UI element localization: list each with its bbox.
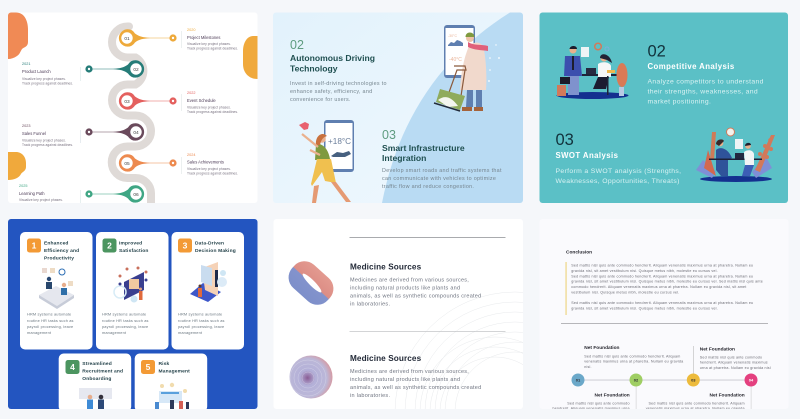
- card 2: [96, 232, 168, 350]
- text: medicine sources 1: Medicine Sources: [350, 262, 422, 272]
- text: foundation bottom left: Net Foundation: [595, 392, 630, 398]
- card 3: HRM systems automate: [178, 312, 222, 316]
- number badge 2: 2: [107, 240, 112, 250]
- text: swot analysis: [556, 131, 681, 185]
- text: foundation bottom right: Sed mattis nisl quis ante commodo hendrerit. Aliquam: [649, 402, 745, 406]
- text: 2021 product launch: Product Launch: [22, 69, 51, 74]
- serpentine road: [112, 26, 151, 210]
- text: foundation top right: Net Foundation: [700, 346, 735, 352]
- illustration: team at table: [696, 128, 775, 182]
- text: 2022 event schedule: [182, 91, 238, 114]
- step 02 marker: [85, 60, 144, 78]
- card 4: Onboarding: [82, 376, 112, 382]
- card 5: Risk: [158, 361, 170, 367]
- text: foundation top right: urna at pharetra. Nullam eu gravida nisl: [700, 366, 771, 370]
- card 2: routine HR tasks such as: [102, 318, 149, 323]
- text: conclusion quote: commodo hendrerit. Aliquam venenatis maximus urna at pharetra. Nullam eu gravida nisl, sit amet: [571, 285, 746, 289]
- panel: conclusion and timeline: [540, 219, 788, 410]
- card 1: Productivity: [44, 256, 74, 262]
- text: medicine sources 1: [350, 262, 481, 308]
- text: 2023 sales funnel: Visualize key project phases.: [22, 138, 66, 142]
- text: medicine sources 2: including natural products like plants and: [350, 377, 460, 383]
- text: competitive analysis: 02: [648, 42, 666, 60]
- text: medicine sources 2: Medicine Sources: [350, 354, 422, 363]
- text: section 02: Invest in self-driving technologies to: [290, 81, 387, 87]
- text: 2025 learning path: [19, 184, 81, 203]
- timeline node 02: 02: [634, 378, 639, 382]
- card 2: Improved: [119, 240, 142, 246]
- text: foundation top left: nisl.: [584, 365, 592, 369]
- text: swot analysis: SWOT Analysis: [556, 151, 619, 160]
- text: 2022 event schedule: Event Schedule: [187, 98, 216, 103]
- panel: autonomous driving: [273, 12, 523, 203]
- timeline node 04: 04: [749, 378, 754, 382]
- blob: orange top left: [8, 12, 28, 59]
- text: 2024 sales achievements: Track progress against deadlines.: [187, 172, 238, 176]
- text: 2023 sales funnel: 2023: [22, 124, 30, 128]
- text: 2021 product launch: 2021: [22, 62, 30, 66]
- text: competitive analysis: market positioning.: [648, 98, 711, 106]
- text: section 02: 02: [290, 38, 304, 52]
- text: conclusion quote: gravida nisl, sit amet vestibulum nisi. Quisque metus nibh, molestie eu cursus vel. Sed mattis nisl quis ante: [571, 280, 763, 284]
- text: section 03: can communicate with vehicles to optimize: [382, 176, 496, 182]
- text: swot analysis: 03: [556, 131, 574, 149]
- card 3: Decision Making: [195, 248, 236, 254]
- text: 2023 sales funnel: Sales Funnel: [22, 131, 46, 136]
- text: foundation top right: [700, 346, 771, 370]
- text: section 02: [290, 38, 387, 103]
- illustration: risk team: [155, 383, 189, 410]
- text: foundation bottom left: [552, 392, 630, 410]
- number badge 3: 3: [183, 240, 188, 250]
- text: 2022 event schedule: 2022: [187, 91, 195, 95]
- icon: striped ring: [283, 255, 339, 311]
- step 02 marker: 02: [133, 67, 139, 73]
- text: swot analysis: Weaknesses, Opportunities, Threats): [556, 178, 680, 185]
- illustration: person with weather phone: +18°C: [328, 137, 351, 146]
- number badge 5: 5: [146, 362, 151, 372]
- card 3: management: [178, 330, 203, 335]
- card 1: management: [27, 330, 52, 335]
- text: foundation bottom left: hendrerit. Aliquam venenatis maximus urna: [552, 406, 630, 410]
- text: medicine sources 1: animals, as well as synthetic compounds created: [350, 294, 481, 300]
- text: 2023 sales funnel: Track progress against deadlines.: [22, 143, 73, 147]
- text: 2023 sales funnel: [22, 124, 81, 147]
- text: foundation top right: hendrerit. Aliquam venenatis maximus: [700, 361, 768, 365]
- text: foundation top left: [584, 345, 684, 369]
- icon: line sphere: [290, 356, 332, 398]
- blue curved shape: [382, 12, 523, 203]
- text: medicine sources 2: Medicines are derived from various sources,: [350, 369, 469, 375]
- step 05 marker: 05: [124, 161, 130, 167]
- card 3: routine HR tasks such as: [178, 318, 225, 323]
- card 1: payroll processing, leave: [27, 324, 73, 329]
- card 5: [135, 354, 207, 412]
- text: section 03: Integration: [382, 153, 426, 163]
- text: 2020 project milestones: [182, 28, 238, 50]
- text: 2020 project milestones: Track progress against deadlines.: [187, 46, 238, 50]
- step 01 marker: [119, 29, 177, 47]
- card 2: Satisfaction: [119, 248, 149, 254]
- card 2: payroll processing, leave: [102, 324, 148, 329]
- card 4: Streamlined: [82, 361, 112, 367]
- text: 2021 product launch: Track progress against deadlines.: [22, 82, 73, 86]
- panel: roadmap timeline: [8, 12, 258, 210]
- text: section 03: Smart Infrastructure: [382, 143, 465, 153]
- illustration: person shovelling snow: [434, 25, 500, 111]
- step 04 marker: 04: [133, 130, 139, 136]
- text: foundation bottom right: [646, 392, 745, 410]
- timeline node 03: 03: [691, 378, 696, 382]
- step 03 marker: 03: [124, 99, 130, 105]
- text: foundation bottom right: venenatis maximus urna at pharetra. Nullam eu gravida: [646, 406, 745, 410]
- text: foundation bottom right: Net Foundation: [710, 392, 745, 398]
- text: section 03: 03: [382, 128, 396, 142]
- timeline node 01: [572, 374, 584, 386]
- card 1: routine HR tasks such as: [27, 318, 74, 323]
- text: medicine sources 1: in laboratories.: [350, 302, 390, 308]
- text: 2024 sales achievements: 2024: [187, 153, 195, 157]
- step 03 marker: [119, 92, 177, 110]
- text: conclusion heading: Conclusion: [566, 250, 592, 256]
- text: swot analysis: Perform a SWOT analysis (Strengths,: [556, 168, 681, 175]
- text: section 03: Develop smart roads and traffic systems that: [382, 168, 502, 174]
- illustration: handshake: [79, 388, 112, 410]
- text: medicine sources 2: [350, 354, 481, 399]
- text: competitive analysis: [648, 42, 764, 106]
- text: foundation top left: venenatis maximus urna at pharetra. Nullam eu gravida: [584, 360, 684, 364]
- illustration: business meeting: [556, 43, 628, 99]
- card 1: Enhanced: [44, 240, 69, 246]
- card 3: payroll processing, leave: [178, 324, 224, 329]
- text: conclusion quote: gravida nisl, sit amet vestibulum nisi. Quisque metus nibh, molestie eu cursus vel.: [571, 269, 718, 273]
- number badge 4: 4: [70, 362, 75, 372]
- card 3: Data-Driven: [195, 240, 224, 246]
- step 01 marker: 01: [124, 36, 130, 42]
- timeline node 01: 01: [576, 378, 581, 382]
- text: medicine sources 2: animals, as well as synthetic compounds created: [350, 385, 481, 391]
- blob: yellow right: [243, 36, 258, 79]
- illustration: isometric charts: [190, 262, 227, 302]
- illustration: isometric desk: [39, 268, 74, 309]
- text: 2021 product launch: [22, 62, 81, 86]
- text: 2025 learning path: Learning Path: [19, 191, 45, 196]
- text: foundation top left: Sed mattis nisl quis ante commodo hendrerit. Aliquam: [584, 354, 680, 358]
- text: 2021 product launch: Visualize key project phases.: [22, 77, 66, 81]
- text: medicine sources 2: in laboratories.: [350, 393, 390, 399]
- step 06 marker: [85, 185, 144, 203]
- card 1: [20, 232, 92, 350]
- card 1: HRM systems automate: [27, 312, 71, 316]
- card 1: Efficiency and: [44, 248, 79, 254]
- text: conclusion quote: Sed mattis nisl quis ante commodo hendrerit. Aliquam venenatis maximus urna at pharetra. Nullam eu: [571, 264, 753, 268]
- text: conclusion quote: Sed mattis nisl quis ante commodo hendrerit. Aliquam venenatis maximus urna at pharetra. Nullam eu: [571, 301, 753, 305]
- step 04 marker: [85, 123, 144, 141]
- text: section 03: [382, 128, 502, 190]
- panel: medicine sources: [274, 219, 523, 409]
- text: conclusion quote: vestibulum nisi. Quisque metus nibh, molestie eu cursus vel.: [571, 290, 679, 294]
- text: competitive analysis: Competitive Analysis: [648, 62, 735, 71]
- text: foundation top right: Sed mattis nisl quis ante commodo: [700, 356, 762, 360]
- timeline node 02: [630, 374, 642, 386]
- text: 2024 sales achievements: Sales Achievements: [187, 160, 224, 164]
- card 2: management: [102, 330, 127, 335]
- panel: hrm benefits: [8, 219, 258, 412]
- illustration: dashboard with people: [114, 266, 148, 302]
- text: section 03: traffic flow and reduce congestion.: [382, 184, 474, 190]
- timeline node 03: [687, 374, 700, 386]
- text: 2025 learning path: Visualize key project phases.: [19, 198, 63, 202]
- text: foundation bottom left: Sed mattis nisl quis ante commodo: [567, 402, 630, 406]
- number badge 1: 1: [32, 240, 37, 250]
- card 4: Recruitment and: [82, 368, 123, 374]
- text: section 02: enhance safety, efficiency, and: [290, 89, 372, 95]
- card 3: [172, 232, 244, 350]
- text: 2024 sales achievements: Visualize key project phases.: [187, 167, 231, 171]
- text: 2025 learning path: 2025: [19, 184, 27, 188]
- text: medicine sources 1: including natural products like plants and: [350, 286, 460, 292]
- text: competitive analysis: their strengths, weaknesses, and: [648, 88, 758, 96]
- illustration: person shovelling snow: -40°C: [449, 57, 462, 63]
- text: conclusion quote: Sed mattis nisl quis ante commodo hendrerit. Aliquam venenatis maximus urna at pharetra. Nullam eu: [571, 274, 753, 278]
- text: 2022 event schedule: Track progress against deadlines.: [187, 110, 238, 114]
- text: 2020 project milestones: 2020: [187, 28, 195, 32]
- text: conclusion quote: [566, 262, 763, 315]
- card 2: HRM systems automate: [102, 312, 146, 316]
- blob: yellow lower left: [8, 152, 26, 180]
- text: 2024 sales achievements: [182, 153, 238, 176]
- step 05 marker: [119, 154, 177, 172]
- text: medicine sources 1: Medicines are derived from various sources,: [350, 278, 469, 284]
- text: foundation top left: Net Foundation: [584, 345, 620, 351]
- card 4: [59, 354, 131, 412]
- step 06 marker: 06: [133, 192, 139, 198]
- text: 2020 project milestones: Visualize key project phases.: [187, 42, 231, 46]
- illustration: person shovelling snow: -30°C: [448, 34, 457, 38]
- text: section 02: convenience for users.: [290, 97, 351, 103]
- text: competitive analysis: Analyze competitors to understand: [648, 78, 764, 86]
- panel: competitive and swot analysis: [540, 12, 788, 203]
- text: 2020 project milestones: Project Milestones: [187, 35, 220, 40]
- text: section 02: Technology: [290, 64, 338, 74]
- text: 2022 event schedule: Visualize key project phases.: [187, 106, 231, 110]
- illustration: person with weather phone: [299, 120, 354, 203]
- card 5: Management: [158, 368, 190, 374]
- text: conclusion quote: gravida nisl, sit amet vestibulum nisi. Quisque metus nibh, molestie eu cursus vel.: [571, 306, 718, 310]
- text: section 02: Autonomous Driving: [290, 53, 375, 63]
- timeline node 04: [744, 374, 758, 386]
- timeline track: [578, 346, 751, 410]
